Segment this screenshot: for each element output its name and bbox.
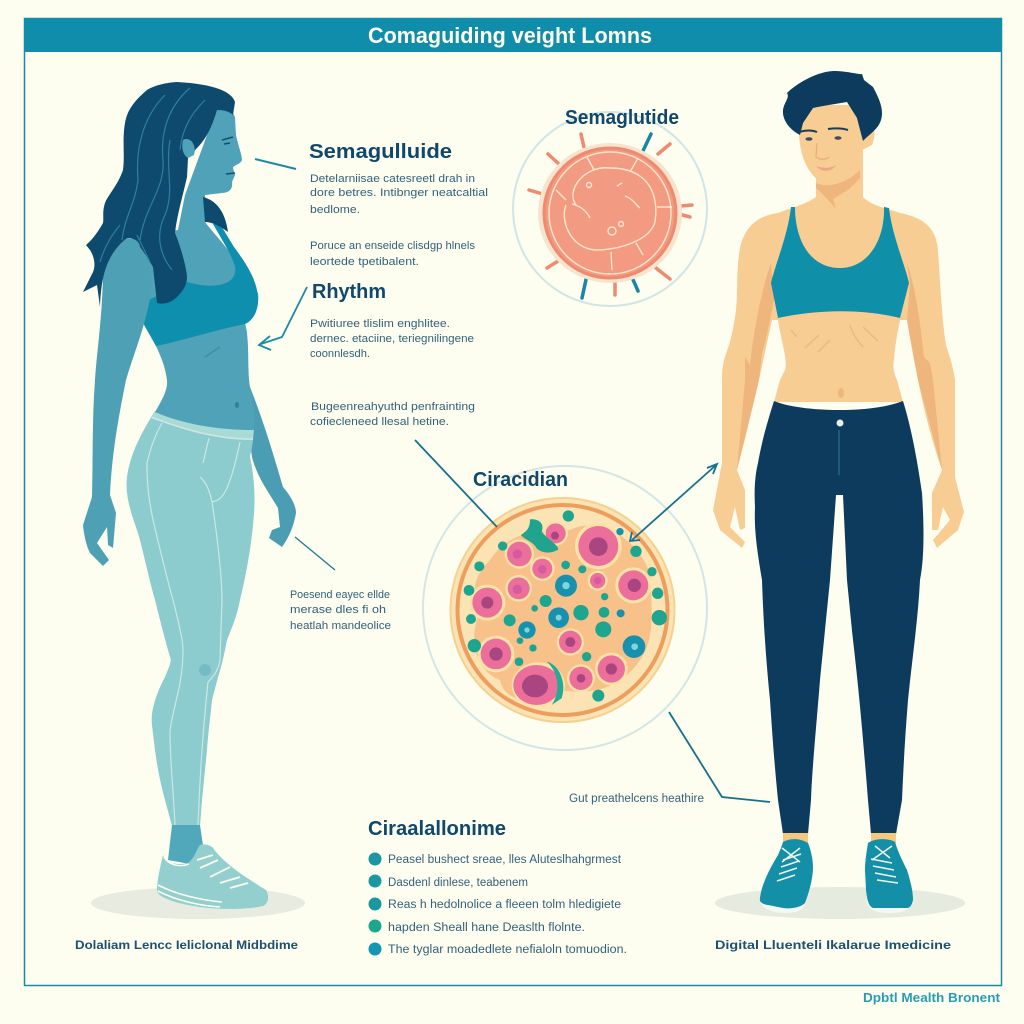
heading: Semagulluide: Semagulluide <box>309 141 452 163</box>
face details <box>222 137 235 174</box>
arrow: two-headed pointer to man <box>630 464 717 541</box>
ground shadow <box>91 887 305 919</box>
spikes <box>529 134 692 295</box>
cell body <box>544 148 676 278</box>
label: gut: Gut preathelcens heathire <box>569 793 704 805</box>
inner tissue <box>474 526 652 700</box>
arm shading <box>737 263 942 470</box>
text block: rhythm note: cofiecleneed llesal hetine. <box>310 416 449 428</box>
figure: man standing <box>713 71 965 919</box>
heading: Ciracidian: Ciracidian <box>473 469 568 491</box>
abdominal lines <box>791 325 878 352</box>
text block: semaglutide description: dore betres. Intibnger neatcaltial <box>310 187 488 199</box>
text block: second note: leortede tpetibalent. <box>310 256 419 268</box>
cell halo <box>538 143 682 283</box>
knee <box>199 664 211 676</box>
text block: left side note <box>290 589 391 632</box>
bullet 3: Reas h hedolnolice a fleeen tolm hledigiete <box>388 899 621 911</box>
ear <box>182 139 195 158</box>
text block: second note: Poruce an enseide clisdgp hlnels <box>310 240 476 252</box>
bullet 1: Peasel bushect sreae, lles Aluteslhahgrmest <box>388 854 622 866</box>
torso and head <box>125 108 258 430</box>
pants button and seam <box>838 430 840 475</box>
text block: rhythm description: dernec. etaciine, teriegnilingene <box>310 333 474 345</box>
text block: semaglutide description <box>310 173 488 216</box>
bullet 4 <box>368 920 585 934</box>
leggings <box>127 411 255 826</box>
sports top <box>139 224 258 346</box>
skin body <box>713 150 964 548</box>
sock <box>168 825 204 864</box>
header bar <box>24 18 1002 52</box>
figure: woman in profile <box>83 82 305 919</box>
bullet 4: hapden Sheall hane Deaslth flolnte. <box>388 922 585 934</box>
text block: rhythm note: Bugeenreahyuthd penfrainting <box>311 401 475 413</box>
panel: bullet list <box>368 818 627 956</box>
ground shadow <box>715 887 965 919</box>
pants <box>755 401 923 834</box>
text block: rhythm description: coonnlesdh. <box>310 348 370 360</box>
head <box>799 105 874 185</box>
shoe soles <box>760 900 913 913</box>
arrow: face pointer <box>255 159 296 169</box>
arrow: hand pointer <box>295 537 335 570</box>
heading: Rhythm: Rhythm <box>312 281 386 303</box>
bullet 5: The tyglar moadedlete nefialoln tomuodion. <box>388 944 627 956</box>
caption: left figure: Dolaliam Lencc Ieliclonal Midbdime <box>75 938 298 952</box>
text block: rhythm description: Pwitiuree tlislim enghlitee. <box>310 318 450 330</box>
text block: left side note: Poesend eayec ellde <box>290 589 390 601</box>
text block: semaglutide description: Detelarniisae catesreetl drah in <box>310 173 475 185</box>
header bar: Comaguiding veight Lomns <box>368 23 652 48</box>
outer ring <box>513 112 707 306</box>
bullet 2: Dasdenl dinlese, teabenem <box>388 877 528 889</box>
arrow: cell pointer left <box>415 440 497 527</box>
text block: left side note: heatlah mandeolice <box>290 620 391 632</box>
text block: rhythm note <box>310 401 475 428</box>
list heading: Ciraalallonime <box>368 818 506 840</box>
hair <box>83 82 235 307</box>
caption: right figure: Digital Lluenteli Ikalarue Imedicine <box>715 938 951 952</box>
ankles <box>783 833 896 844</box>
waistband and seams <box>150 411 254 440</box>
callout: cell circle <box>513 112 707 306</box>
footer brand: Dpbtl Mealth Bronent <box>863 991 1001 1005</box>
text block: second note <box>310 240 476 268</box>
arrow: rhythm pointer <box>259 287 307 350</box>
shoe <box>157 844 268 909</box>
sports top <box>771 207 909 318</box>
face details <box>799 128 848 132</box>
text block: rhythm description <box>310 318 474 360</box>
shoe left <box>760 839 813 908</box>
text block: left side note: merase dles fi oh <box>290 604 386 616</box>
text block: semaglutide description: bedlome. <box>310 204 360 216</box>
far arm <box>247 380 296 547</box>
heading: Semaglutide: Semaglutide <box>565 107 679 129</box>
cells <box>464 510 667 708</box>
laces <box>777 846 898 883</box>
near arm <box>83 238 152 566</box>
outer ring <box>423 466 707 750</box>
callout: cell cluster circle <box>423 466 707 750</box>
neck shadow <box>816 170 860 209</box>
shoe right <box>865 839 913 908</box>
arrow: gut pointer <box>669 712 770 802</box>
cell disc <box>450 498 674 722</box>
hair <box>783 71 882 141</box>
membrane lines <box>549 152 672 274</box>
